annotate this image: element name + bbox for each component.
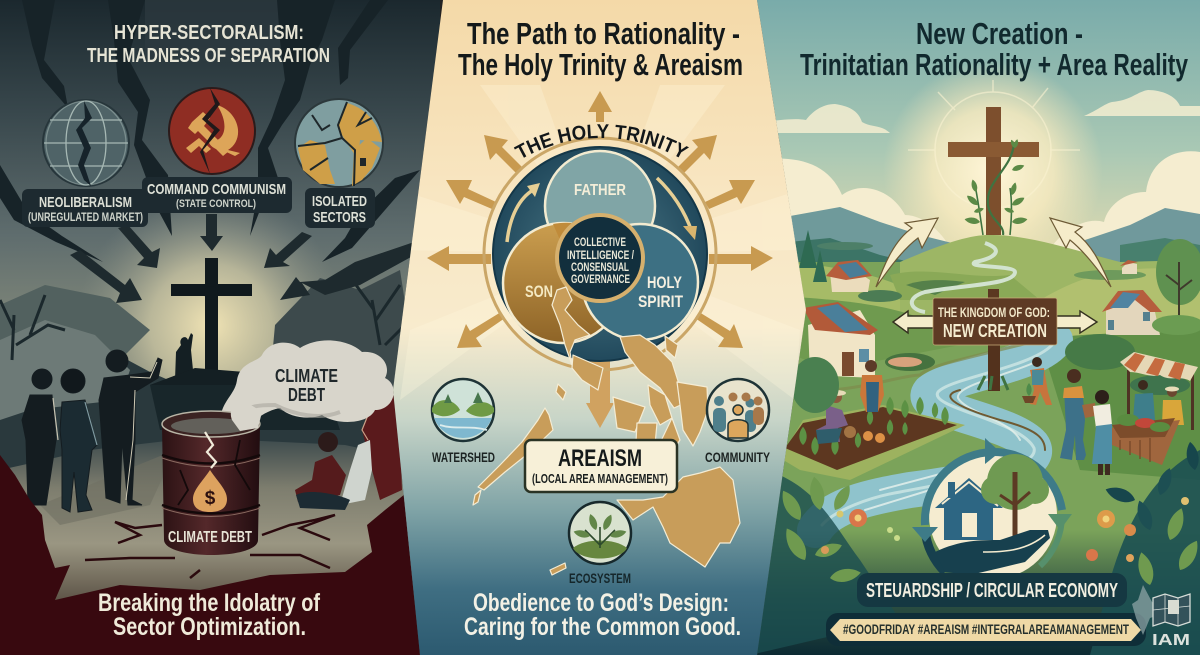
icon: cracked hammer and sickle	[169, 88, 255, 174]
title: path to rationality	[458, 16, 743, 82]
icon: dollar drop	[193, 470, 227, 512]
icon: dollar drop: $	[205, 488, 216, 509]
winding path up hill	[912, 243, 1015, 312]
label: areaism: (LOCAL AREA MANAGEMENT)	[532, 471, 668, 486]
icon: circular economy	[912, 438, 1072, 579]
light rays	[400, 85, 800, 400]
holy spirit circle	[582, 224, 698, 340]
caption: obedience to god's design: Caring for the Common Good.	[464, 613, 741, 641]
title: path to rationality: The Holy Trinity & Areaism	[458, 47, 743, 82]
icon: ecosystem	[569, 502, 631, 564]
label: isolated sectors	[305, 188, 375, 228]
barrel: climate debt: CLIMATE DEBT	[168, 529, 252, 546]
farmers	[816, 360, 884, 444]
label: community: COMMUNITY	[705, 449, 770, 465]
radiating arrows	[427, 91, 773, 428]
icon: cross with vine	[948, 107, 1039, 235]
holy spirit circle: HOLY	[647, 273, 682, 292]
label: neoliberalism: (UNREGULATED MARKET)	[28, 210, 143, 224]
cloud: climate debt: CLIMATE	[275, 366, 338, 386]
seated family	[295, 395, 402, 510]
logo: IAM: IAM	[1152, 632, 1190, 649]
icon: community	[707, 379, 769, 441]
panel: path to rationality	[393, 0, 806, 655]
caption: breaking the idolatry: Breaking the Idolatry of	[98, 589, 321, 617]
icon: crucifix on hill	[150, 258, 260, 385]
gardener	[1022, 357, 1052, 405]
center circle: collective intelligence: CONSENSUAL	[571, 260, 629, 274]
map: philippines	[473, 287, 740, 575]
river	[793, 340, 1055, 530]
people looking up	[22, 350, 162, 512]
caption: breaking the idolatry: Sector Optimization.	[113, 613, 306, 641]
arrow: upward left	[876, 218, 938, 287]
label: stewardship and circular economy	[857, 573, 1127, 607]
label: isolated sectors: ISOLATED	[312, 193, 367, 210]
ground	[0, 440, 420, 600]
mountains	[791, 207, 1200, 264]
father circle	[545, 151, 655, 261]
title: hyper-sectoralism	[87, 25, 329, 62]
arrows converging on the cross	[70, 214, 420, 303]
green hills	[757, 235, 1200, 655]
panel: new creation	[750, 0, 1200, 655]
bush and flower bed	[791, 334, 1135, 413]
panel: hyper-sectoralism	[0, 0, 440, 655]
label: command communism	[142, 177, 292, 213]
son circle: SON	[525, 282, 553, 301]
cloud: climate debt: DEBT	[288, 385, 325, 405]
center circle: collective intelligence	[557, 215, 643, 301]
hashtag ribbon	[826, 613, 1146, 646]
center circle: collective intelligence: INTELLIGENCE /	[567, 248, 634, 262]
title: new creation: New Creation -	[916, 16, 1083, 51]
label: neoliberalism	[22, 189, 148, 227]
cycle arrows	[507, 178, 692, 242]
holy spirit circle: SPIRIT	[638, 292, 683, 311]
houses with solar panels	[803, 260, 1162, 378]
tree right	[1152, 239, 1200, 335]
title: hyper-sectoralism: THE MADNESS OF SEPARATION	[87, 45, 330, 67]
title: new creation	[800, 16, 1189, 82]
cloud: climate debt	[222, 340, 394, 422]
son circle	[503, 223, 623, 343]
signpost: kingdom of god	[893, 289, 1097, 391]
small figure on hill	[175, 333, 193, 376]
market stall	[1060, 352, 1198, 475]
barrel: climate debt	[162, 398, 262, 555]
title: hyper-sectoralism: HYPER-SECTORALISM:	[114, 22, 304, 44]
dead trees and mountains	[0, 270, 404, 468]
label: areaism	[525, 440, 677, 492]
label: ecosystem: ECOSYSTEM	[569, 570, 631, 586]
curved heading: the holy trinity: THE HOLY TRINITY	[514, 124, 689, 158]
label: neoliberalism: NEOLIBERALISM	[39, 194, 132, 211]
logo: IAM	[1132, 585, 1190, 649]
icon: cracked globe	[43, 100, 129, 186]
signpost: kingdom of god: THE KINGDOM OF GOD:	[938, 304, 1050, 320]
label: command communism: COMMAND COMMUNISM	[147, 181, 286, 198]
trees left	[799, 230, 873, 282]
sun halo	[908, 80, 1080, 208]
caption: obedience to god's design: Obedience to God’s Design:	[473, 589, 729, 617]
clouds	[757, 90, 1200, 255]
icon: watershed	[432, 379, 494, 441]
garden bed with crops	[780, 360, 965, 480]
label: command communism: (STATE CONTROL)	[176, 198, 256, 210]
father circle: FATHER	[574, 182, 626, 199]
signpost: kingdom of god: NEW CREATION	[943, 321, 1047, 341]
center circle: collective intelligence: COLLECTIVE	[574, 235, 626, 249]
shoppers	[1060, 369, 1112, 475]
foreground foliage	[750, 441, 1200, 655]
diagram: holy trinity	[482, 124, 718, 371]
label: isolated sectors: SECTORS	[313, 209, 366, 226]
title: path to rationality: The Path to Rationality -	[467, 16, 740, 51]
storm cracks	[0, 0, 420, 262]
foreground: maroon cracked earth	[0, 455, 420, 655]
caption: breaking the idolatry	[99, 593, 320, 640]
label: areaism: AREAISM	[558, 445, 642, 472]
caption: obedience to god's design	[464, 589, 741, 641]
icon: isolated sectors globe	[295, 99, 383, 187]
center circle: collective intelligence: GOVERNANCE	[571, 272, 630, 286]
label: watershed: WATERSHED	[432, 449, 495, 465]
arrow: upward right	[1050, 218, 1111, 287]
